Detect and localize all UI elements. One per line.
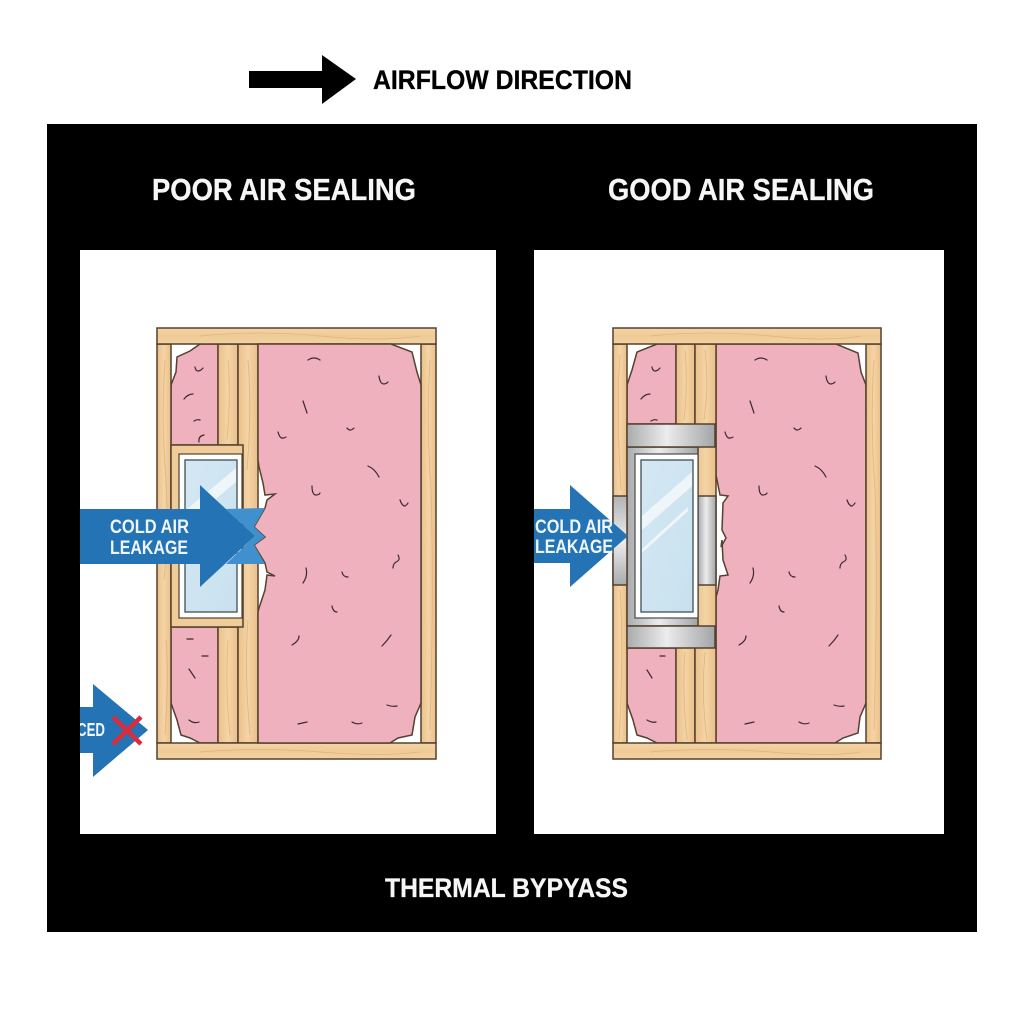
black background panel	[47, 124, 977, 932]
footer label: thermal bypass: THERMAL BYPYASS	[385, 873, 628, 903]
heading: poor air sealing: POOR AIR SEALING	[152, 172, 416, 207]
flashing: right side	[698, 496, 716, 585]
insulation: large bay	[716, 344, 866, 743]
wood grain	[163, 333, 432, 754]
insulation: large bay with tear	[254, 344, 421, 743]
arrow: cold air leakage: COLD AIR	[535, 517, 613, 538]
flashing: window surround	[627, 447, 698, 626]
arrow: cold air leakage	[80, 485, 265, 587]
panel: good air sealing	[534, 250, 944, 834]
insulation fibres	[184, 358, 408, 724]
arrow: cold air leakage: LEAKAGE	[110, 538, 188, 559]
arrow: cold air leakage: COLD AIR	[110, 517, 189, 538]
window: good panel	[635, 454, 698, 618]
insulation: small upper bay	[627, 344, 676, 424]
window: poor panel	[179, 454, 242, 618]
insulation: small lower bay	[171, 627, 218, 743]
insulation fibres	[641, 358, 855, 724]
flashing: left side	[613, 496, 627, 585]
arrow: cold air leakage	[534, 485, 628, 587]
legend label: airflow direction: AIRFLOW DIRECTION	[373, 65, 632, 95]
heading: good air sealing: GOOD AIR SEALING	[608, 172, 874, 207]
flashing: top band	[627, 424, 715, 447]
arrow: cold air leakage: LEAKAGE	[535, 537, 613, 558]
arrow: blocked with red cross	[80, 684, 148, 777]
wall framing: right	[613, 328, 881, 759]
arrow: blocked with red cross: CED	[77, 720, 105, 740]
insulation: small upper bay	[171, 344, 218, 445]
wall framing: left	[157, 328, 436, 759]
insulation: small lower bay	[627, 648, 676, 743]
window framing	[171, 445, 243, 627]
flashing: bottom band	[627, 626, 715, 648]
icon: airflow direction arrow	[249, 55, 356, 104]
panel: poor air sealing	[60, 250, 496, 834]
wood grain	[618, 333, 876, 754]
